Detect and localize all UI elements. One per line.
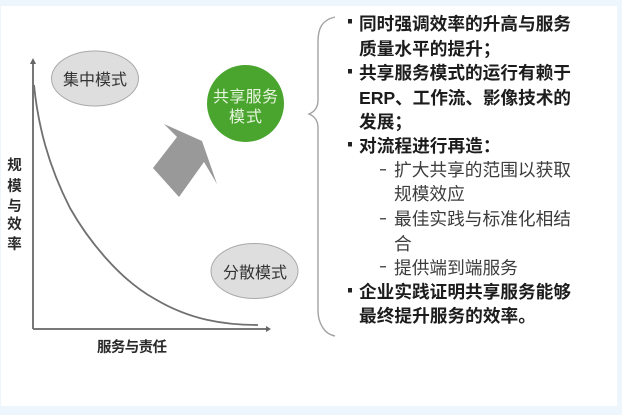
point 3	[348, 136, 571, 278]
circle: shared services mode: 模式	[229, 108, 262, 126]
sub-point: scale	[380, 160, 571, 204]
ellipse: decentralized mode: 分散模式	[223, 264, 287, 282]
point 2: ERP、工作流、影像技术的	[359, 88, 571, 108]
point 1: 同时强调效率的升高与服务	[359, 13, 571, 34]
point 4: 企业实践证明共享服务能够	[359, 281, 571, 302]
point 2	[348, 62, 571, 132]
y axis label: 率	[7, 235, 22, 253]
x axis label: 服务与责任	[97, 338, 167, 356]
decay curve	[34, 85, 258, 325]
ellipse: centralized mode: 集中模式	[63, 71, 127, 89]
point 3: 对流程进行再造：	[359, 136, 501, 156]
point 2: 共享服务模式的运行有赖于	[359, 62, 571, 83]
right brace	[309, 17, 335, 336]
ellipse: centralized mode	[52, 51, 138, 106]
point 1	[348, 13, 571, 59]
y axis label	[7, 157, 22, 253]
point 4	[348, 281, 571, 326]
sub-point: end to end: 提供端到端服务	[394, 258, 518, 278]
text block: key points	[348, 13, 571, 326]
point 4: 最终提升服务的效率。	[359, 306, 536, 326]
sub-point: scale: 规模效应	[394, 184, 465, 204]
ellipse: decentralized mode	[211, 244, 298, 298]
sub-point: best practice: 合	[394, 234, 412, 254]
point 1: 质量水平的提升；	[359, 38, 501, 59]
y axis label: 效	[7, 215, 22, 233]
point 2: 发展；	[359, 111, 412, 132]
y axis label: 模	[7, 177, 22, 195]
y axis label: 规	[7, 157, 22, 174]
chart: scale and efficiency curve	[7, 58, 271, 356]
y axis arrow	[30, 58, 36, 329]
x axis arrow	[33, 326, 271, 332]
arrow: transition to shared services	[153, 124, 217, 197]
sub-point: scale: 扩大共享的范围以获取	[394, 160, 571, 180]
y axis label: 与	[7, 198, 22, 215]
sub-point: best practice: 最佳实践与标准化相结	[394, 209, 571, 229]
sub-point: best practice	[380, 209, 571, 254]
circle: shared services mode: 共享服务	[213, 88, 278, 106]
circle: shared services mode	[207, 65, 284, 142]
